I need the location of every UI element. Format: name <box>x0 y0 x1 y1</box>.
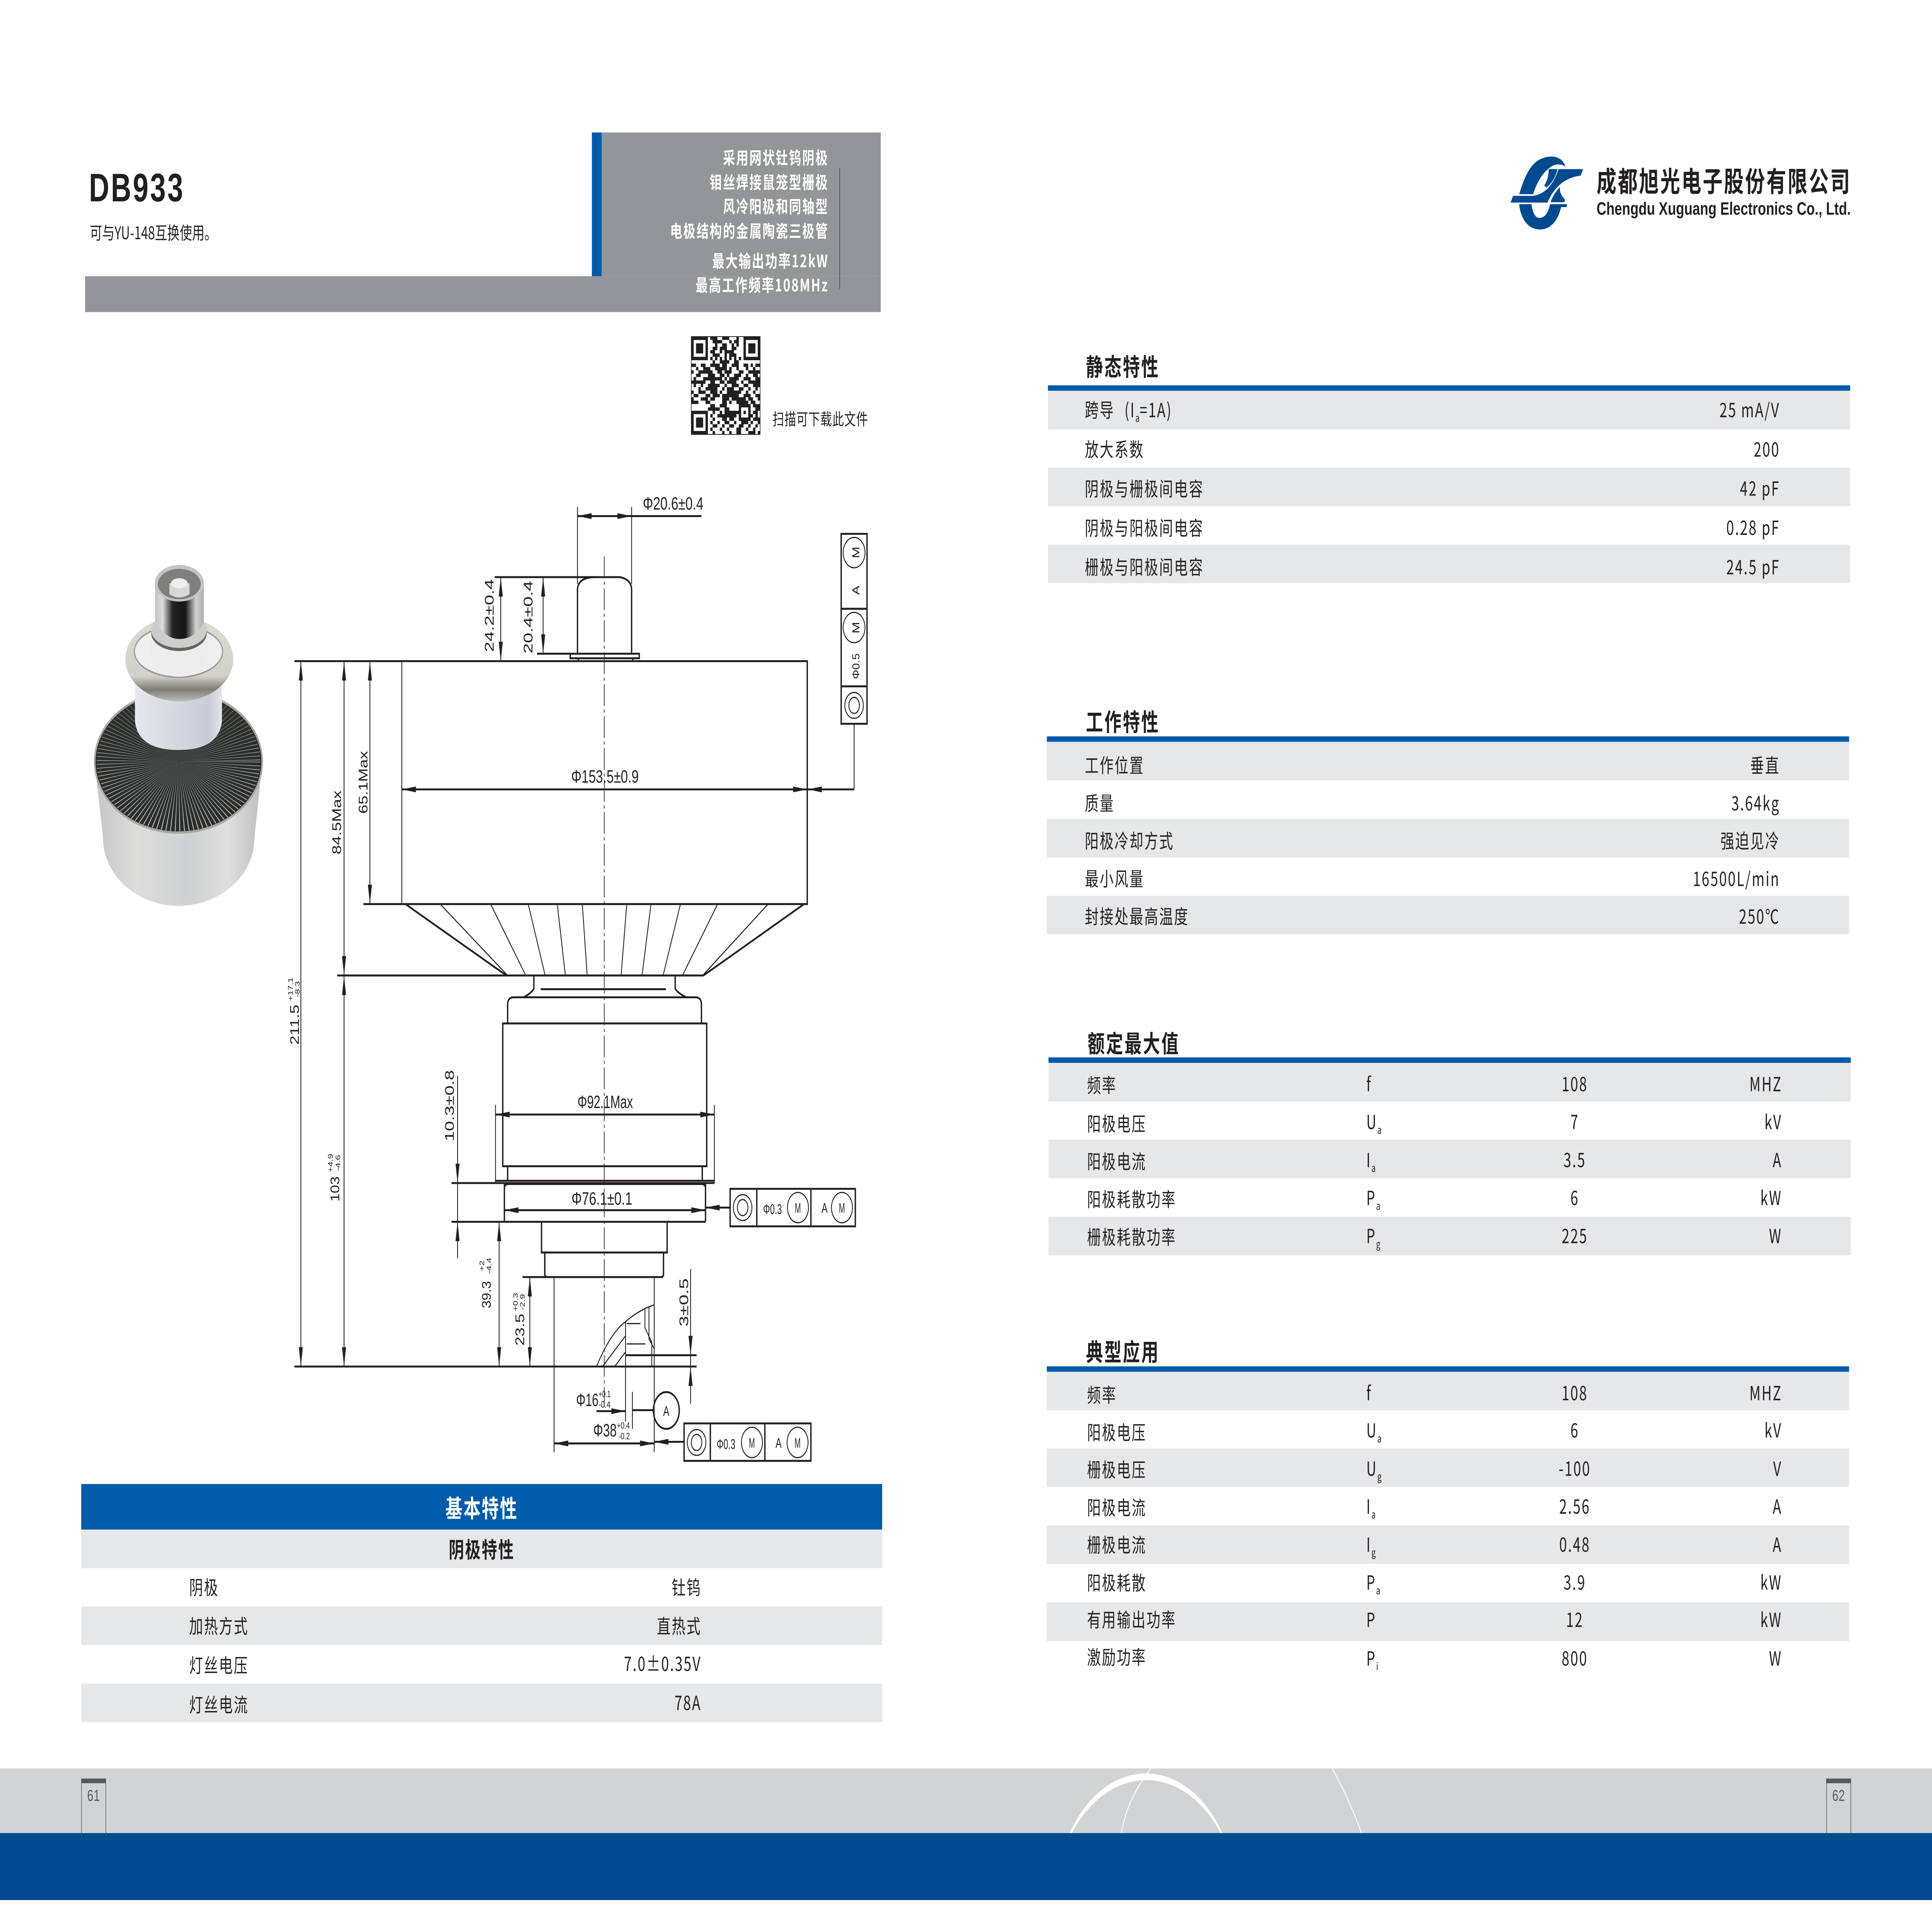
row: cathode-anode capacitance: 阴极与阳极间电容 <box>1085 513 1204 541</box>
row: heating method <box>81 1606 882 1645</box>
row: cathode-grid capacitance: 阴极与栅极间电容 <box>1085 474 1204 502</box>
row: grid voltage: -100 <box>1559 1454 1591 1482</box>
row: anode dissipation <box>1048 1178 1851 1217</box>
row: mass: 3.64kg <box>1731 788 1780 816</box>
row: grid dissipation: 栅极耗散功率 <box>1087 1222 1176 1250</box>
heading: 额定最大值 <box>1088 1024 1180 1059</box>
grey band <box>85 276 881 312</box>
row: grid current: A <box>1773 1530 1782 1558</box>
header panel: model title and key features <box>85 133 881 312</box>
dimension labels: A <box>776 1435 782 1451</box>
feature line 2: 钼丝焊接鼠笼型栅极 <box>710 169 829 194</box>
dimension labels: -2.9 <box>519 1294 526 1310</box>
company name Chinese: 成都旭光电子股份有限公司 <box>1597 160 1850 200</box>
row: anode dissipation: kW <box>1760 1183 1782 1211</box>
dimension labels: 103 <box>328 1176 342 1202</box>
row: frequency: f <box>1366 1378 1372 1406</box>
row: grid dissipation: W <box>1769 1221 1782 1249</box>
row: frequency <box>1048 1063 1851 1102</box>
row: anode dissipation: Pa <box>1366 1567 1380 1597</box>
row: transconductance: 跨导 (Ia=1A) <box>1085 395 1172 425</box>
subtitle: interchangeability note: 可与YU-148互换使用。 <box>90 219 217 244</box>
heading rule <box>1048 1057 1851 1063</box>
vertical hairline <box>839 168 840 289</box>
row: anode voltage: 7 <box>1570 1107 1579 1135</box>
page number left: 61 <box>87 1787 100 1804</box>
row: anode current: 阳极电流 <box>1087 1493 1146 1520</box>
row: mass <box>1047 780 1849 819</box>
row: anode voltage: 6 <box>1570 1415 1579 1444</box>
dimension labels: +0.3 <box>512 1293 519 1311</box>
dimension labels: Φ76.1±0.1 <box>571 1188 632 1209</box>
feature line 6: 最高工作频率108MHz <box>696 272 829 296</box>
company name English: Chengdu Xuguang Electronics Co., Ltd. <box>1597 199 1851 219</box>
row: useful output power: 有用输出功率 <box>1087 1605 1176 1633</box>
row: grid voltage: 栅极电压 <box>1087 1455 1146 1483</box>
product photo: vacuum tube <box>95 565 262 906</box>
row: useful output power: 12 <box>1566 1605 1583 1633</box>
upper outline: anode, rod and fins <box>294 507 867 976</box>
row: anode current: A <box>1773 1491 1782 1519</box>
row: cathode <box>81 1568 882 1607</box>
row: cooling <box>1047 819 1849 858</box>
row: grid-anode capacitance: 24.5 pF <box>1726 552 1780 580</box>
dimension labels: 10.3±0.8 <box>442 1070 457 1141</box>
download caption: 扫描可下载此文件 <box>772 406 868 430</box>
row: grid current: 0.48 <box>1559 1530 1590 1558</box>
dimension labels: M <box>850 546 862 558</box>
row: frequency: 108 <box>1562 1069 1588 1097</box>
row: transconductance: 25 mA/V <box>1719 395 1780 423</box>
sub-heading: cathode characteristics <box>81 1530 882 1568</box>
panel: basic characteristics table <box>81 1484 882 1722</box>
dimension labels: Φ38 <box>593 1420 617 1440</box>
dimension labels: M <box>794 1435 801 1451</box>
blue accent bar <box>592 133 602 276</box>
row: heating method: 直热式 <box>657 1611 701 1639</box>
row: grid current: 栅极电流 <box>1087 1530 1146 1558</box>
page number left <box>81 1779 106 1836</box>
dimension labels: M <box>749 1435 755 1451</box>
row: anode current: Ia <box>1366 1491 1376 1521</box>
lower outline: ceramic body and base <box>294 974 855 1461</box>
panel: static characteristics <box>1048 351 1850 583</box>
row: anode dissipation: Pa <box>1366 1183 1380 1213</box>
dimension labels: Φ0.5 <box>850 654 862 679</box>
row: drive power <box>1047 1641 1849 1679</box>
row: anode dissipation: 6 <box>1570 1183 1579 1211</box>
dimension labels: Φ92.1Max <box>578 1092 633 1112</box>
row: anode voltage <box>1047 1410 1849 1449</box>
row: anode dissipation: 3.9 <box>1564 1567 1586 1595</box>
dimension labels: A <box>663 1403 669 1419</box>
heading: 工作特性 <box>1086 703 1160 738</box>
row: filament voltage <box>81 1645 882 1684</box>
row: position: 工作位置 <box>1085 751 1145 778</box>
row: max seal temperature <box>1047 896 1849 934</box>
footer blue strip <box>0 1833 1932 1900</box>
page number right: 62 <box>1832 1787 1845 1804</box>
row: anode voltage: 阳极电压 <box>1087 1109 1146 1137</box>
row: anode voltage: Ua <box>1366 1107 1381 1137</box>
dimension labels: +4.9 <box>327 1154 334 1172</box>
row: anode voltage: 阳极电压 <box>1087 1417 1146 1445</box>
row: grid dissipation: 225 <box>1562 1221 1588 1249</box>
footer band <box>0 1769 1932 1900</box>
row: useful output power: P <box>1366 1605 1376 1633</box>
dimension labels: 39.3 <box>480 1281 493 1308</box>
dimension labels: +17.1 <box>287 977 294 1001</box>
row: anode current: 2.56 <box>1559 1491 1590 1519</box>
row: drive power: 激励功率 <box>1087 1642 1146 1670</box>
row: anode voltage: Ua <box>1366 1415 1381 1445</box>
dimension labels: Φ16 <box>576 1390 599 1410</box>
row: grid current <box>1047 1525 1849 1564</box>
dimension labels: 211.5 <box>287 1004 302 1045</box>
row: useful output power <box>1047 1602 1849 1641</box>
QR code <box>691 337 760 434</box>
dimension labels <box>287 494 862 1452</box>
page number right <box>1826 1779 1851 1836</box>
heading rule <box>1047 736 1849 742</box>
row: max seal temperature: 250℃ <box>1739 902 1780 930</box>
dimension labels: -0.4 <box>599 1399 611 1410</box>
title: model number: DB933 <box>89 165 185 210</box>
heading: 典型应用 <box>1086 1333 1160 1368</box>
heading: 静态特性 <box>1086 347 1160 383</box>
row: frequency: 频率 <box>1087 1070 1117 1098</box>
table title bar: 基本特性 <box>446 1489 518 1524</box>
row: grid dissipation: Pg <box>1366 1221 1380 1251</box>
row: filament voltage: 灯丝电压 <box>189 1650 249 1679</box>
row: filament current: 78A <box>675 1688 701 1716</box>
feature line 4: 电极结构的金属陶瓷三极管 <box>670 217 829 242</box>
row: grid voltage: V <box>1773 1454 1782 1482</box>
row: anode current <box>1048 1140 1851 1178</box>
sub-heading: cathode characteristics: 阴极特性 <box>449 1533 515 1564</box>
row: frequency: MHZ <box>1749 1069 1782 1097</box>
row: minimum airflow <box>1047 857 1849 896</box>
row: grid-anode capacitance <box>1048 545 1850 583</box>
dimension labels: -4.6 <box>335 1155 342 1171</box>
row: frequency: 频率 <box>1087 1380 1117 1408</box>
dimension labels: A <box>850 586 862 595</box>
feature line 3: 风冷阳极和同轴型 <box>723 193 829 218</box>
dimension labels: 20.4±0.4 <box>521 581 535 654</box>
row: cooling: 强迫见冷 <box>1721 826 1780 854</box>
row: useful output power: kW <box>1760 1605 1782 1633</box>
row: mass: 质量 <box>1085 788 1115 816</box>
row: anode dissipation: 阳极耗散 <box>1087 1568 1146 1596</box>
row: filament current: 灯丝电流 <box>189 1690 249 1718</box>
row: max seal temperature: 封接处最高温度 <box>1085 902 1189 930</box>
panel: typical application <box>1047 1336 1849 1679</box>
row: anode current: Ia <box>1366 1145 1376 1175</box>
dimension labels: Φ0.3 <box>763 1202 782 1217</box>
table title bar <box>81 1484 882 1530</box>
grey feature block <box>602 133 881 276</box>
row: anode voltage <box>1048 1102 1851 1140</box>
technical drawing: dimensioned tube outline <box>287 494 867 1461</box>
footer arcs <box>0 1769 1932 1833</box>
row: frequency: MHZ <box>1749 1378 1782 1406</box>
row: anode current <box>1047 1488 1849 1526</box>
dimension labels: -0.2 <box>619 1431 630 1442</box>
row: amplification factor: 200 <box>1754 434 1780 463</box>
row: anode current: 阳极电流 <box>1087 1147 1146 1175</box>
company logo and name <box>1510 157 1851 230</box>
row: filament voltage: 7.0±0.35V <box>624 1649 701 1677</box>
dimension labels: M <box>839 1200 845 1216</box>
row: drive power: Pi <box>1366 1643 1378 1674</box>
row: amplification factor <box>1048 429 1850 468</box>
dimension labels: +0.4 <box>617 1421 630 1431</box>
dimension labels: 65.1Max <box>356 751 370 814</box>
panel: absolute maximum ratings <box>1048 1027 1851 1255</box>
row: grid voltage <box>1047 1449 1849 1487</box>
row: frequency: 108 <box>1562 1378 1588 1406</box>
row: cathode: 钍钨 <box>672 1573 701 1600</box>
dimension labels: M <box>795 1200 801 1216</box>
row: minimum airflow: 最小风量 <box>1085 864 1145 892</box>
row: cathode-grid capacitance <box>1048 468 1850 506</box>
panel: operating characteristics <box>1047 706 1849 934</box>
row: cathode-anode capacitance: 0.28 pF <box>1726 513 1780 541</box>
row: cathode-anode capacitance <box>1048 506 1850 545</box>
heading rule <box>1047 1366 1849 1372</box>
row: grid dissipation <box>1048 1217 1851 1255</box>
row: transconductance <box>1048 391 1850 429</box>
row: position: 垂直 <box>1750 751 1780 778</box>
centre line <box>604 557 605 1407</box>
row: heating method: 加热方式 <box>189 1611 249 1639</box>
row: anode voltage: kV <box>1764 1415 1782 1444</box>
row: drive power: W <box>1769 1643 1782 1672</box>
row: anode voltage: kV <box>1764 1107 1782 1135</box>
dimension labels: Φ0.3 <box>717 1437 735 1452</box>
row: position <box>1047 742 1849 780</box>
feature line 1: 采用网状钍钨阴极 <box>723 144 829 169</box>
heading rule <box>1048 385 1850 391</box>
logo emblem <box>1510 157 1583 230</box>
dimension labels: -8.3 <box>294 981 301 997</box>
dimension labels: 3±0.5 <box>677 1278 691 1326</box>
dimension labels: +2 <box>478 1260 486 1271</box>
row: anode dissipation: 阳极耗散功率 <box>1087 1185 1176 1212</box>
dimension labels: +0.1 <box>599 1389 611 1399</box>
row: anode dissipation: kW <box>1760 1567 1782 1595</box>
row: anode current: A <box>1773 1145 1782 1173</box>
row: amplification factor: 放大系数 <box>1085 434 1145 463</box>
row: drive power: 800 <box>1562 1643 1588 1672</box>
row: frequency <box>1047 1372 1849 1410</box>
row: frequency: f <box>1366 1069 1372 1097</box>
row: cooling: 阳极冷却方式 <box>1085 826 1174 854</box>
row: cathode-grid capacitance: 42 pF <box>1740 473 1780 501</box>
row: filament current <box>81 1684 882 1722</box>
dimension labels: M <box>850 622 862 633</box>
row: grid current: Ig <box>1366 1530 1376 1559</box>
row: grid voltage: Ug <box>1366 1454 1381 1484</box>
row: anode dissipation <box>1047 1564 1849 1602</box>
dimension labels: 23.5 <box>513 1314 527 1346</box>
feature line 5: 最大输出功率12kW <box>712 247 829 272</box>
dimension labels: 24.2±0.4 <box>482 579 497 652</box>
row: cathode: 阴极 <box>189 1573 219 1600</box>
dimension labels: -4.4 <box>486 1258 493 1274</box>
dimension labels: A <box>821 1200 828 1216</box>
dimension labels: 84.5Max <box>330 790 344 855</box>
row: anode current: 3.5 <box>1564 1145 1586 1173</box>
row: minimum airflow: 16500L/min <box>1693 864 1780 892</box>
dimension labels: Φ153.5±0.9 <box>571 767 639 787</box>
row: grid-anode capacitance: 栅极与阳极间电容 <box>1085 552 1204 580</box>
dimension labels: Φ20.6±0.4 <box>643 494 703 514</box>
